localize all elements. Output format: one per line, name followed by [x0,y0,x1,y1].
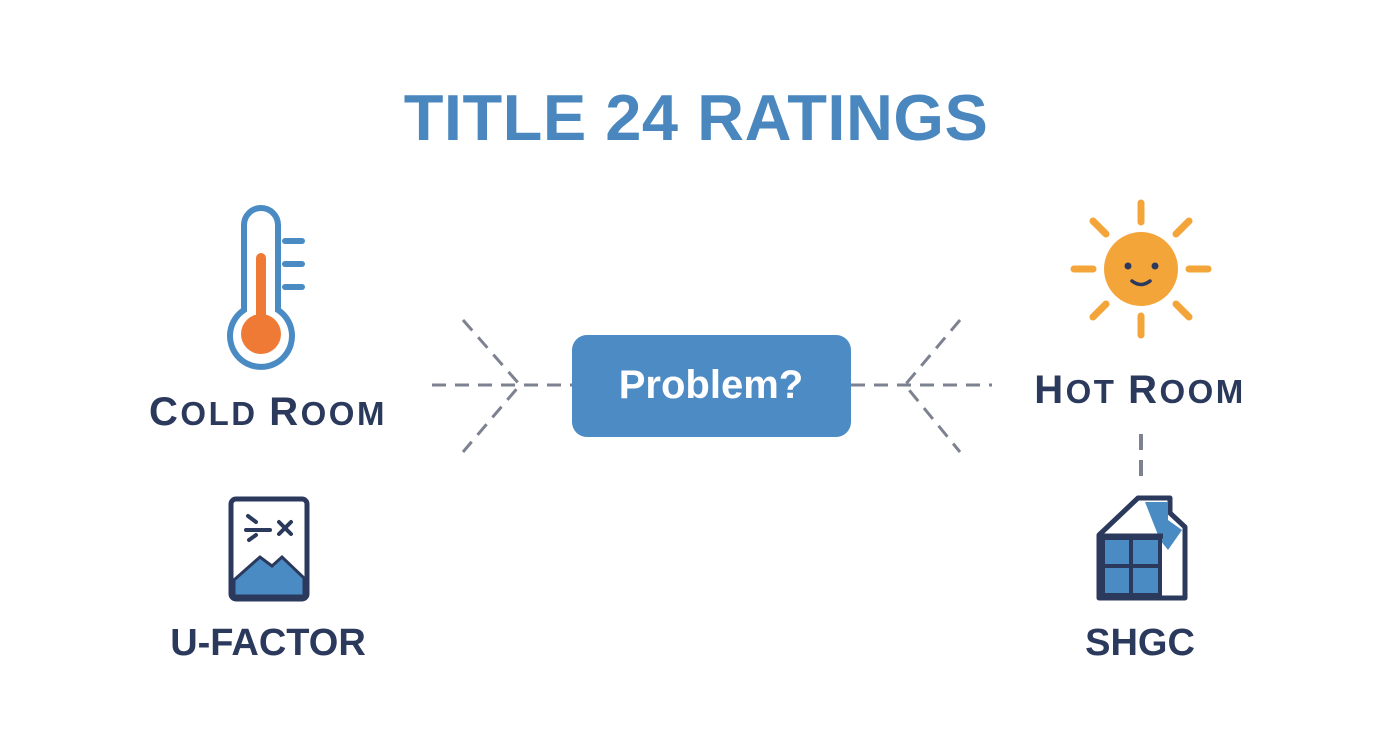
icon: u-factor window [231,499,307,599]
label: u-factor: U-FACTOR [170,622,366,664]
title: TITLE 24 RATINGS [404,81,988,154]
label: hot room: HOT ROOM [1034,368,1246,412]
label: SHGC: SHGC [1085,622,1195,664]
icon: house SHGC [1099,498,1185,598]
icon: thermometer [230,208,302,367]
label: cold room: COLD ROOM [149,390,387,434]
connector: hot room to SHGC [1139,434,1143,482]
icon: sun [1074,203,1208,335]
problem box: Problem? [619,363,803,407]
arrow: right dashed connector [851,320,992,452]
arrow: left dashed connector [432,320,572,452]
problem box [572,335,851,437]
